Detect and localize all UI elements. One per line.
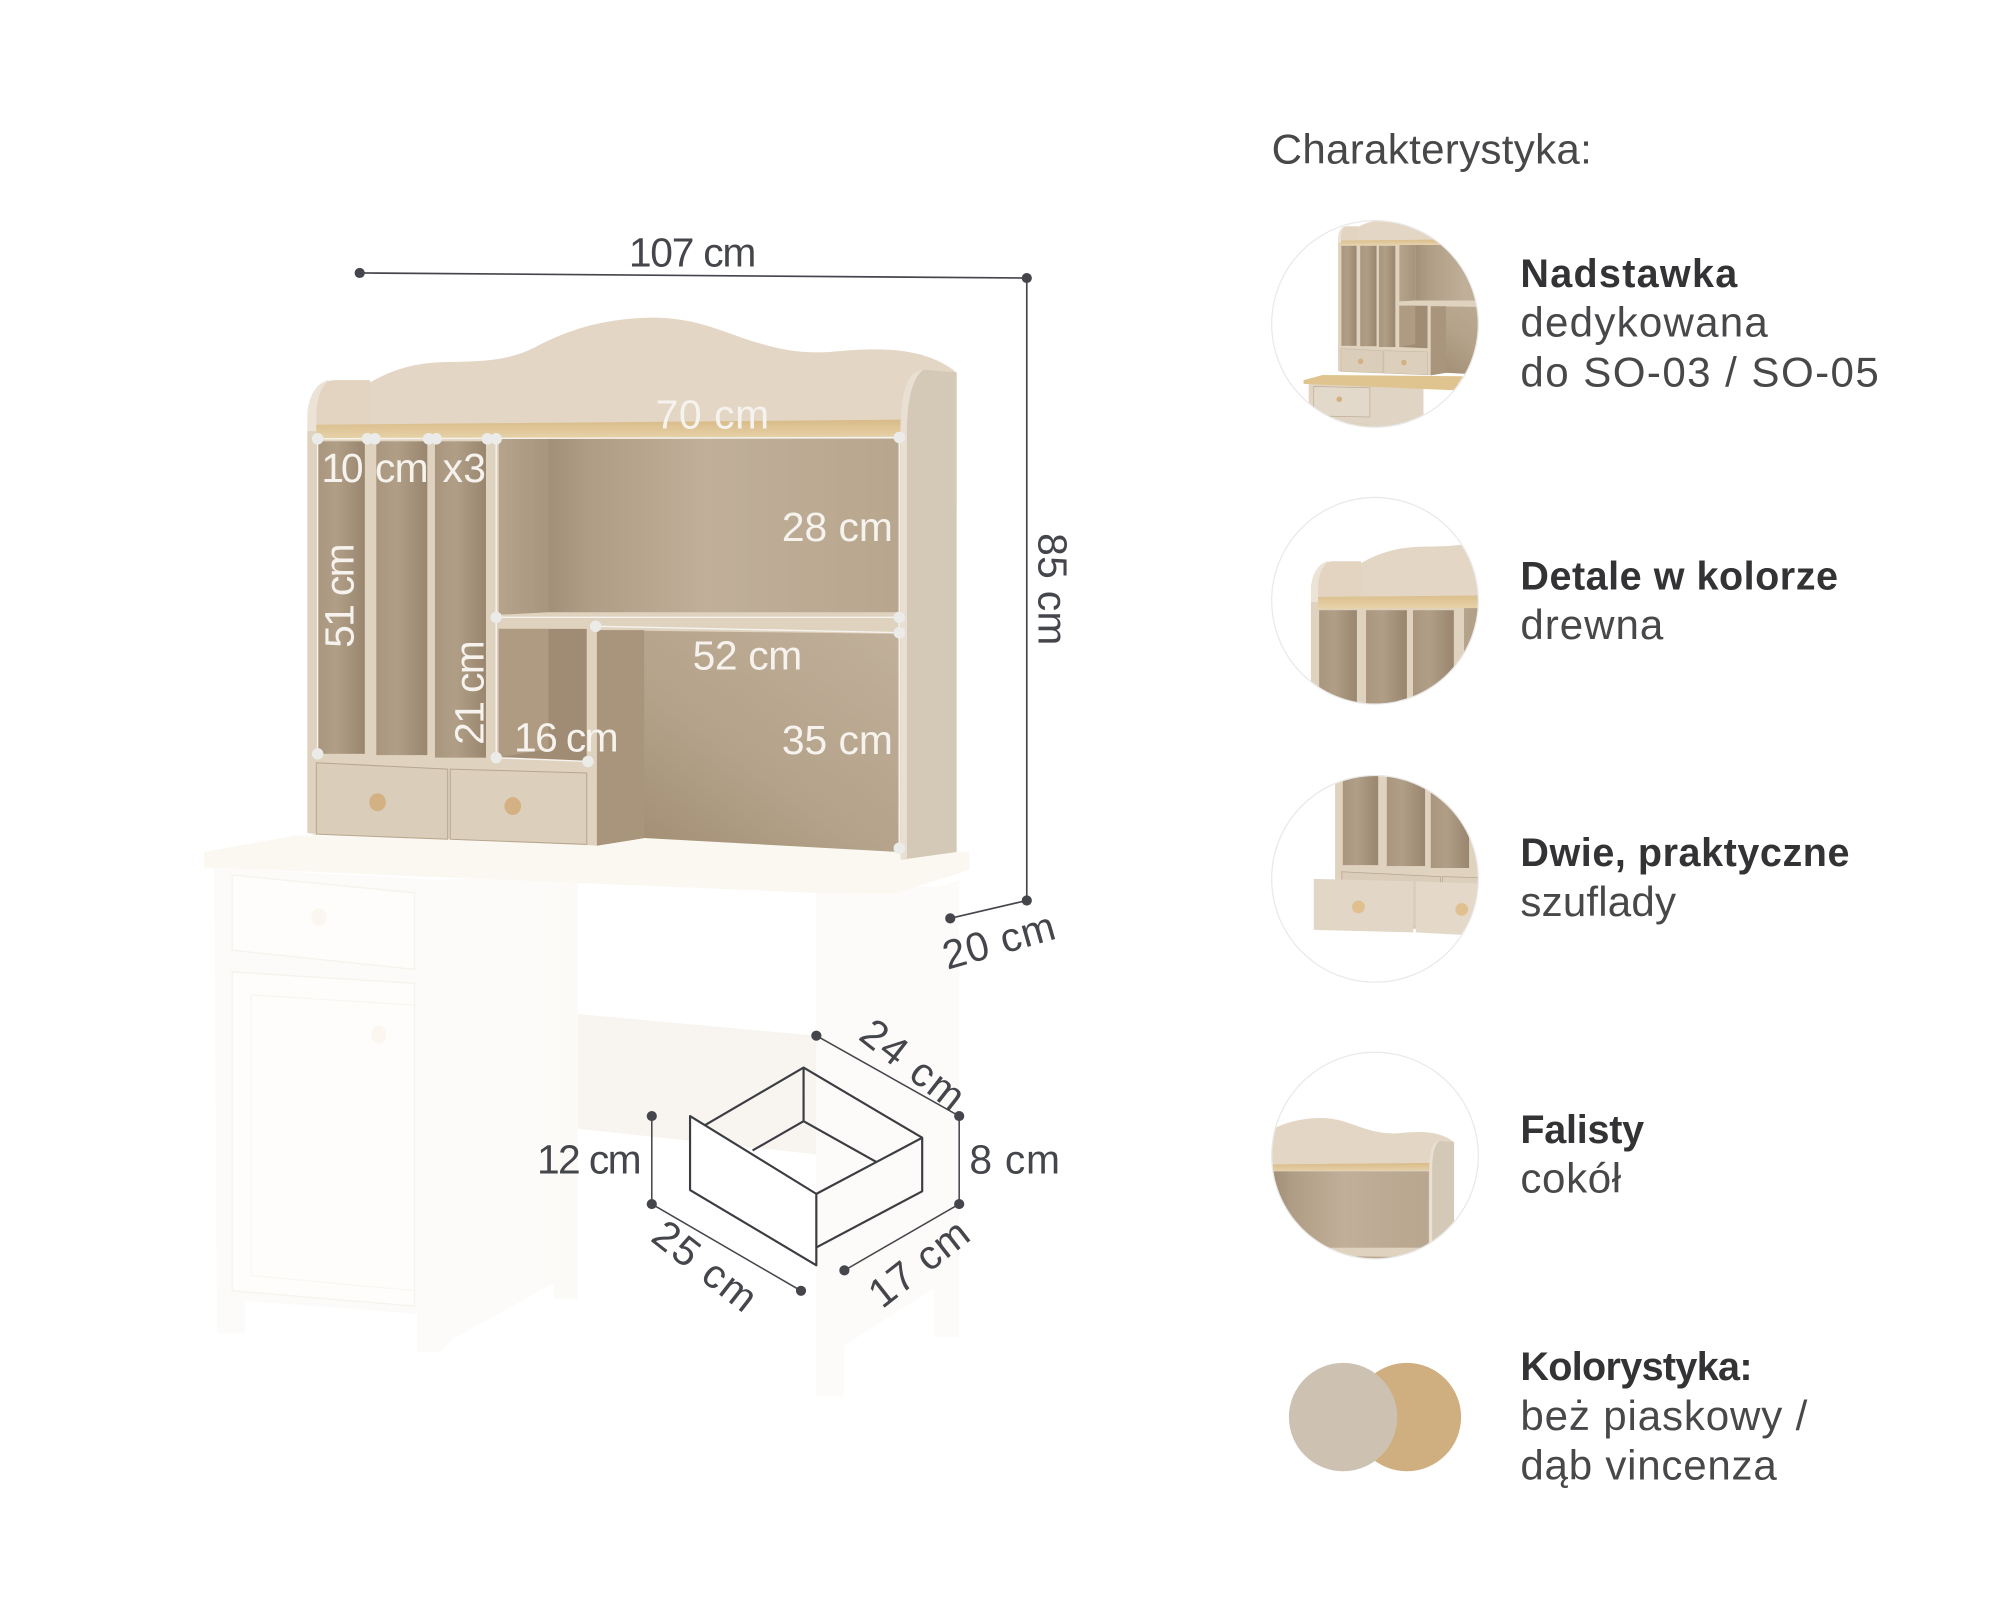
Falisty text: Falisty xyxy=(1520,1108,1644,1152)
drawer line diagram xyxy=(690,1068,922,1265)
Nadstawka text: Nadstawka xyxy=(1520,252,1738,296)
interior dimension labels: 28 cm xyxy=(782,504,893,550)
interior dimension labels: 52 cm xyxy=(693,633,802,679)
overall dimension lines xyxy=(355,268,1032,923)
Detale text: drewna xyxy=(1520,601,1664,648)
Kolorystyka text: beż piaskowy / xyxy=(1520,1392,1808,1439)
overall dimension labels: 20 cm xyxy=(937,903,1060,979)
Falisty text xyxy=(1520,1108,1644,1202)
Nadstawka text xyxy=(1520,252,1879,395)
interior dimension labels: x3 xyxy=(443,445,486,491)
Kolorystyka text: Kolorystyka: xyxy=(1520,1345,1753,1389)
thumbnail: Nadstawka xyxy=(1271,220,1479,428)
heading: Charakterystyka: xyxy=(1272,125,1592,172)
interior dimension labels: 35 cm xyxy=(782,717,893,763)
desk (pale background furniture) xyxy=(204,835,969,1397)
drawer dimension labels: 12 cm xyxy=(537,1136,642,1182)
Kolorystyka text: dąb vincenza xyxy=(1520,1442,1777,1489)
Dwie text: szuflady xyxy=(1520,878,1676,925)
drawer dimension labels xyxy=(537,1009,1060,1321)
drawer dimension labels: 25 cm xyxy=(644,1211,766,1321)
hutch top unit xyxy=(307,318,957,860)
Nadstawka text: dedykowana xyxy=(1520,299,1768,346)
thumbnail: Detale w kolorze drewna xyxy=(1271,496,1479,705)
white interior dimension lines xyxy=(312,432,905,854)
Detale text xyxy=(1520,554,1838,648)
drawer dimension lines xyxy=(647,1031,964,1296)
interior dimension labels: 16 cm xyxy=(514,714,619,760)
interior dimension labels xyxy=(316,392,893,763)
drawer dimension labels: 8 cm xyxy=(969,1136,1060,1182)
interior dimension labels: 10 xyxy=(321,445,364,491)
interior dimension labels: 21 cm xyxy=(446,640,492,745)
overall dimension labels: 85 cm xyxy=(1029,533,1075,645)
interior dimension labels: 70 cm xyxy=(656,392,769,438)
Kolorystyka text xyxy=(1520,1345,1808,1489)
overall dimension labels xyxy=(629,230,1075,979)
Nadstawka text: do SO-03 / SO-05 xyxy=(1520,348,1879,395)
Dwie text: Dwie, praktyczne xyxy=(1520,831,1849,875)
interior dimension labels: cm xyxy=(375,445,429,491)
interior dimension labels: 51 cm xyxy=(316,543,362,648)
colour swatches xyxy=(1289,1363,1461,1471)
Dwie text xyxy=(1520,831,1849,925)
thumbnail: Falisty cokół xyxy=(1271,1052,1479,1260)
drawer dimension labels: 24 cm xyxy=(852,1009,974,1119)
Falisty text: cokół xyxy=(1520,1155,1622,1202)
thumbnail: Dwie, praktyczne szuflady xyxy=(1271,775,1479,983)
overall dimension labels: 107 cm xyxy=(629,230,756,276)
drawer dimension labels: 17 cm xyxy=(859,1210,978,1317)
Detale text: Detale w kolorze xyxy=(1520,554,1838,598)
